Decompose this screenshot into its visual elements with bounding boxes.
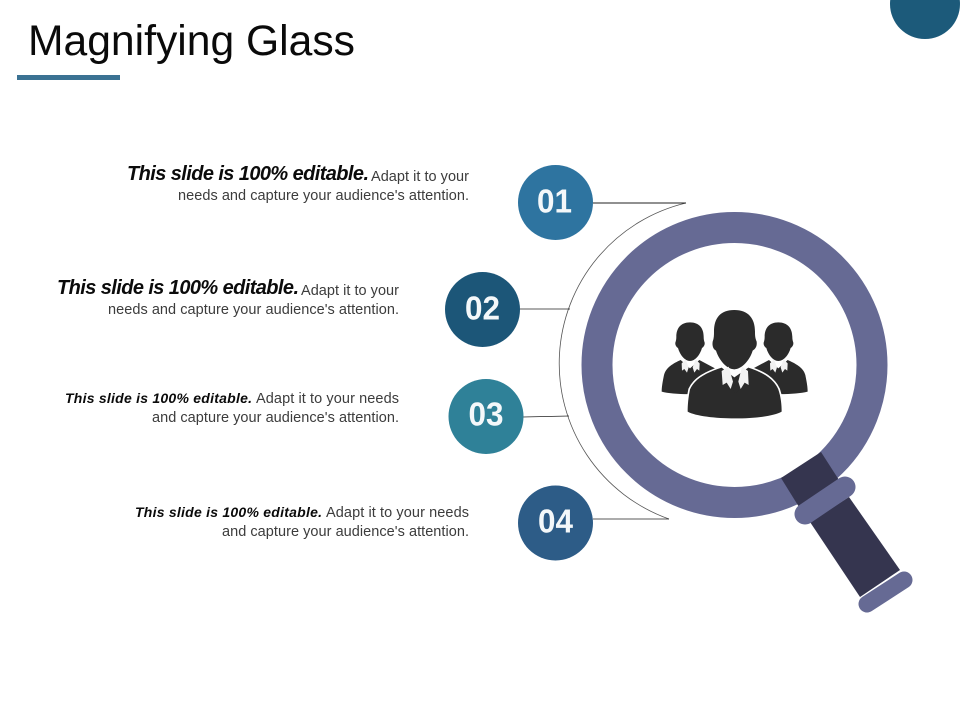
- connector 04: [593, 518, 669, 520]
- text block 03: and capture your audience's attention.: [152, 410, 399, 426]
- text block 01: This slide is 100% editable.: [127, 163, 369, 185]
- number 04: 04: [538, 502, 574, 540]
- title underline: [17, 75, 120, 80]
- text block 03: This slide is 100% editable.: [65, 390, 252, 406]
- connector 01: [593, 202, 686, 204]
- number badge 01: [518, 165, 593, 240]
- item 02: [57, 272, 570, 347]
- number badge 04: [518, 486, 593, 560]
- text block 04: and capture your audience's attention.: [222, 524, 469, 540]
- number 01: 01: [537, 182, 572, 220]
- left collar: [682, 359, 700, 373]
- magnifying glass: [597, 228, 904, 604]
- number badge 02: [445, 272, 520, 347]
- text block 02: needs and capture your audience's attention.: [108, 302, 399, 318]
- text block 02: [57, 277, 399, 318]
- text block 02: This slide is 100% editable.: [57, 277, 299, 299]
- text block 04: [135, 504, 469, 540]
- handle neck: [781, 452, 839, 507]
- icon: group of business people: [662, 310, 808, 418]
- text block 04: Adapt it to your needs: [326, 505, 469, 521]
- text block 03: Adapt it to your needs: [256, 391, 399, 407]
- text block 01: Adapt it to your: [371, 169, 469, 185]
- text block 01: [127, 163, 469, 204]
- handle end cap: [867, 580, 904, 604]
- number 02: 02: [465, 290, 500, 326]
- text block 02: Adapt it to your: [301, 283, 399, 299]
- centre person: [688, 310, 782, 418]
- text block 04: This slide is 100% editable.: [135, 504, 322, 520]
- left person: [662, 322, 715, 394]
- item 01: [127, 163, 686, 240]
- handle grip: [810, 497, 900, 597]
- item 03: [65, 379, 569, 454]
- corner decoration circle: [890, 0, 960, 39]
- connector 02: [520, 308, 570, 310]
- curved connector arc: [559, 203, 686, 519]
- lens ring: [597, 228, 872, 502]
- connector 03: [523, 416, 569, 417]
- text block 03: [65, 390, 399, 426]
- right collar: [770, 359, 788, 373]
- text block 01: needs and capture your audience's attention.: [178, 188, 469, 204]
- centre collar and tie: [722, 367, 749, 393]
- handle collar: [805, 487, 845, 514]
- number badge 03: [448, 379, 524, 454]
- title: Magnifying Glass: [28, 17, 355, 65]
- number 03: 03: [468, 396, 504, 432]
- item 04: [135, 486, 669, 560]
- right person: [753, 322, 808, 394]
